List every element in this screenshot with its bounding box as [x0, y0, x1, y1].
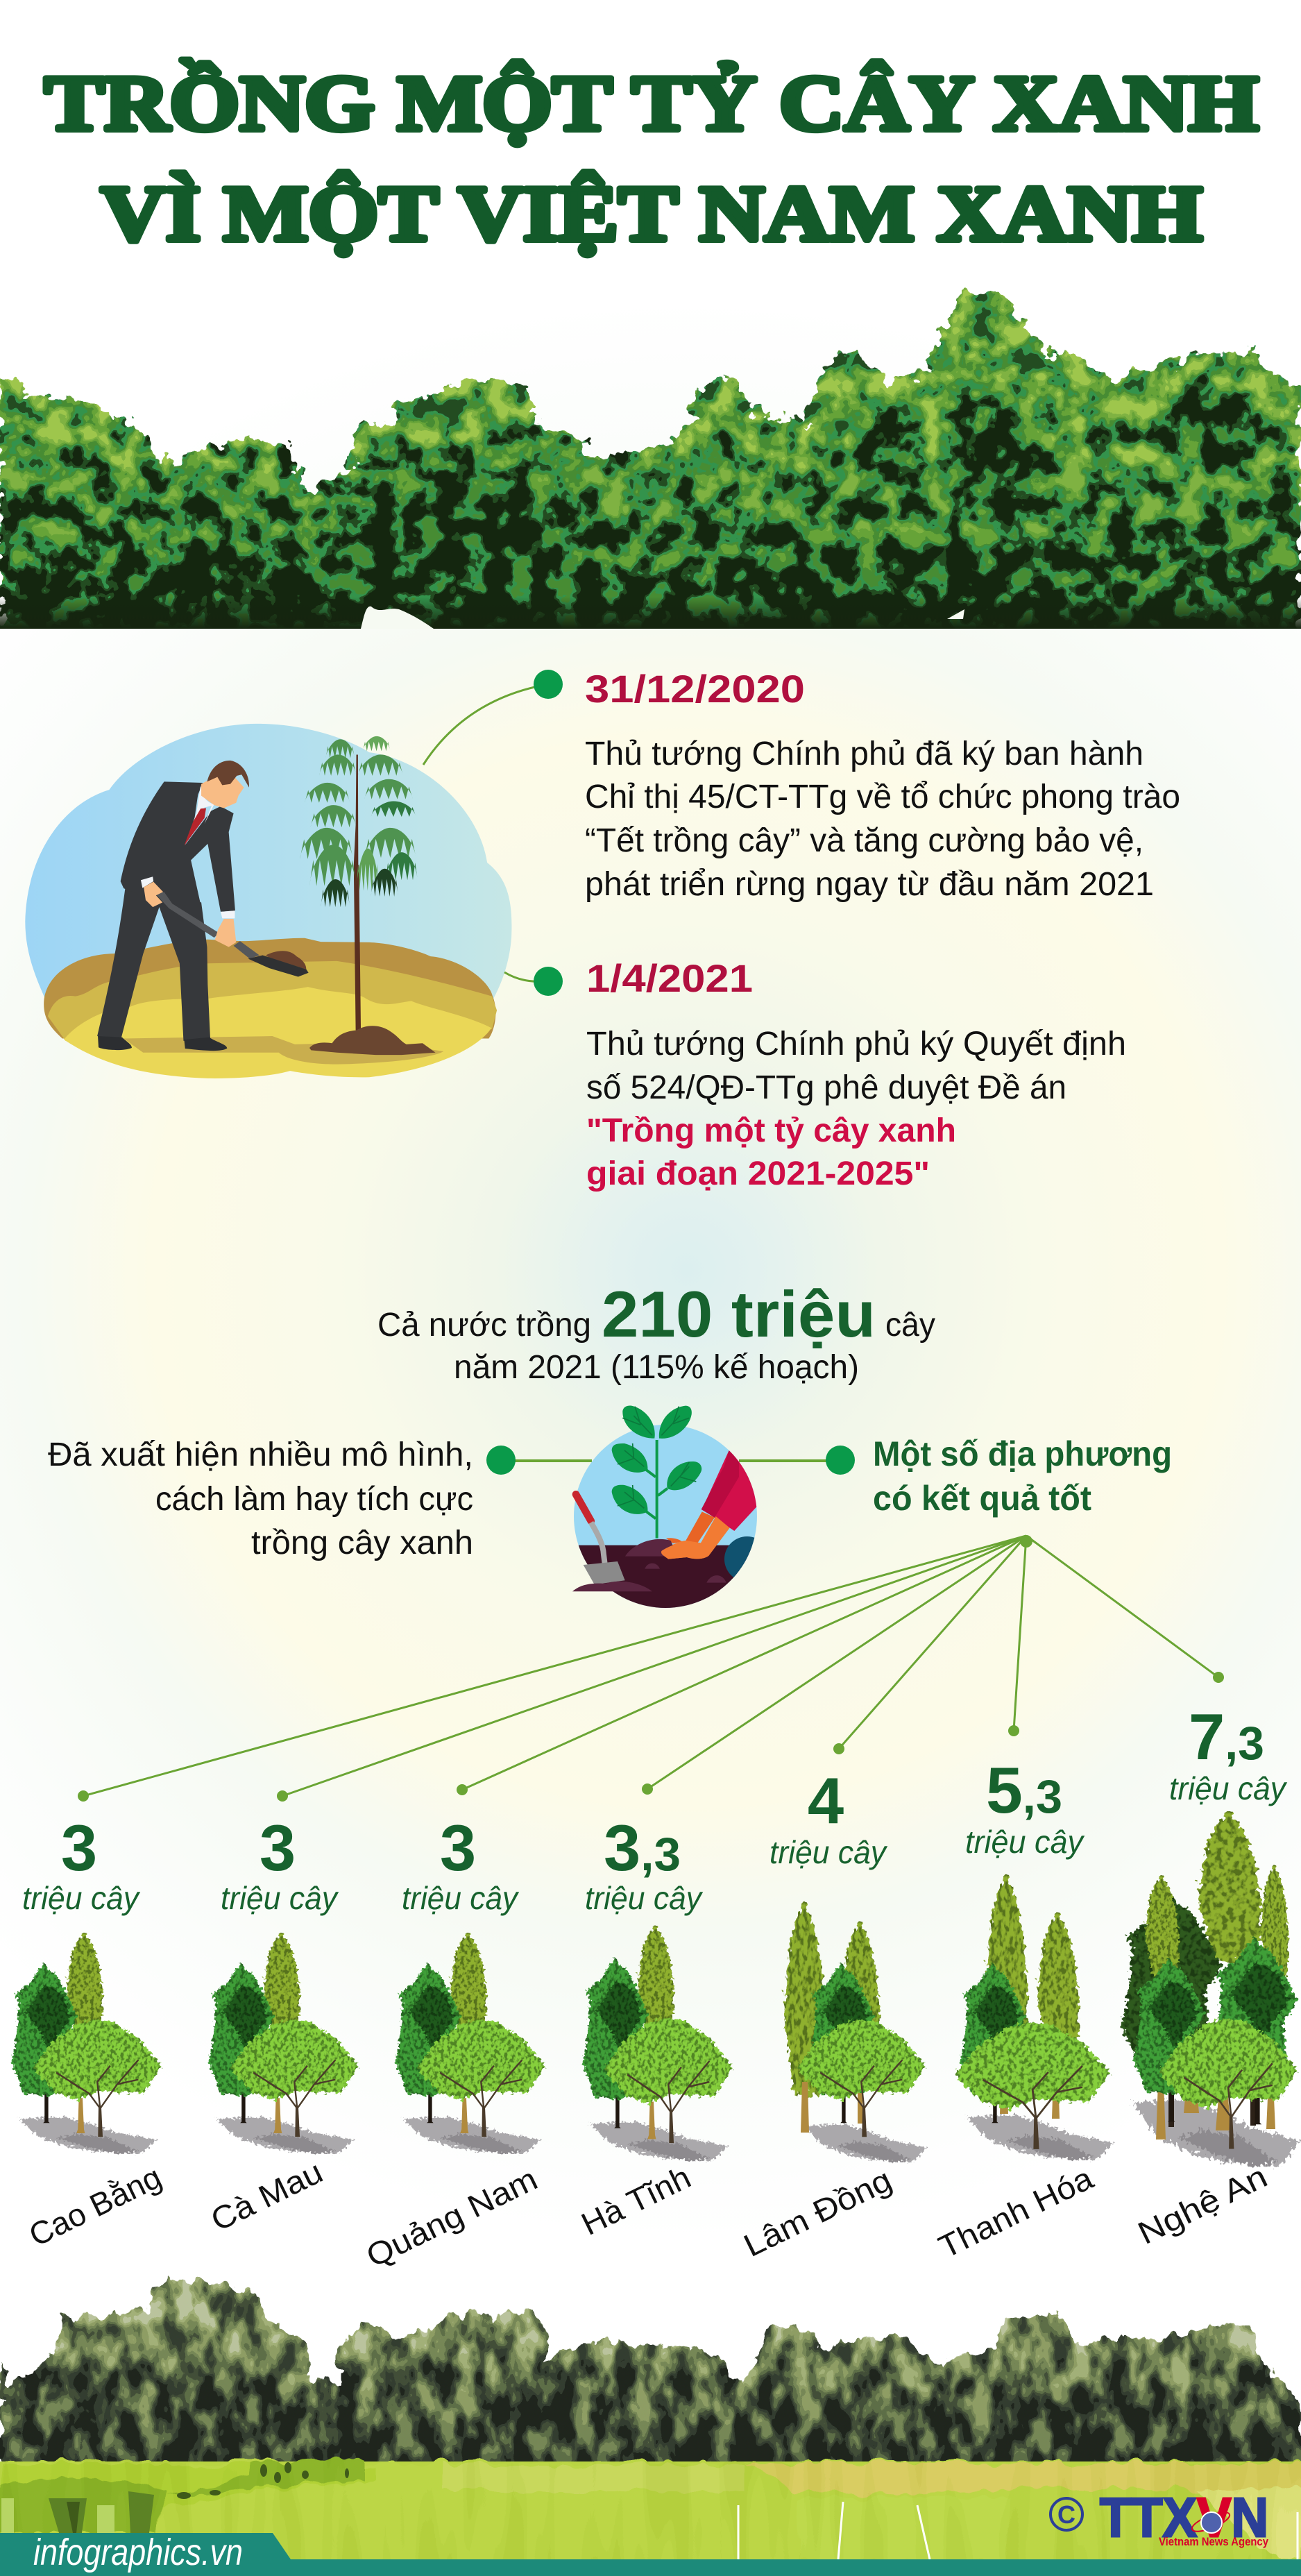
text: many models — [48, 1437, 473, 1561]
trees: Nghệ An — [1121, 1813, 1300, 2166]
text block: 1/4/2021: giai đoạn 2021-2025" — [586, 1155, 930, 1192]
stat: Hà Tĩnh — [585, 1811, 704, 1916]
place labels — [24, 2153, 1273, 2274]
place labels: Hà Tĩnh — [576, 2159, 696, 2242]
trees: Cao Bằng — [12, 1933, 162, 2153]
stat: Lâm Đồng: 4 — [808, 1764, 844, 1837]
meadow — [0, 2457, 1301, 2565]
place labels: Nghệ An — [1132, 2158, 1273, 2251]
stat: Lâm Đồng: triệu cây — [769, 1834, 888, 1870]
sapling — [300, 736, 436, 1055]
text: many models: cách làm hay tích cực — [155, 1481, 473, 1518]
stat: Thanh Hóa: triệu cây — [965, 1824, 1085, 1860]
place labels: Thanh Hóa — [933, 2160, 1098, 2265]
man with shovel — [97, 761, 309, 1051]
text block: 1/4/2021: Thủ tướng Chính phủ ký Quyết định — [586, 1026, 1126, 1062]
text: localities with good results — [873, 1434, 1172, 1518]
trees: Hà Tĩnh — [583, 1926, 733, 2161]
headline: 210 million trees: cây — [885, 1307, 935, 1344]
trees: Lâm Đồng — [784, 1903, 927, 2162]
illustration: man planting a tree — [25, 724, 511, 1078]
text block: 31/12/2020: “Tết trồng cây” và tăng cường bảo vệ, — [585, 822, 1143, 859]
connector: illustration to second date — [504, 972, 548, 981]
text block: 1/4/2021 — [586, 956, 1126, 1192]
stat: Quảng Nam: triệu cây — [402, 1880, 520, 1916]
text block: 31/12/2020 — [585, 667, 1180, 903]
place labels: Cà Mau — [205, 2153, 328, 2238]
dot: first date — [534, 670, 563, 699]
text block: 31/12/2020: 31/12/2020 — [585, 667, 805, 711]
fan of connector lines to provinces — [78, 1535, 1224, 1802]
stat: Nghệ An: 7,3 — [1189, 1700, 1264, 1773]
sky blob — [25, 724, 511, 1001]
stat: Cà Mau: triệu cây — [221, 1880, 339, 1916]
trees: Quảng Nam — [396, 1933, 545, 2153]
icon: seedling and hand — [572, 1406, 757, 1608]
stat: Nghệ An — [1169, 1700, 1288, 1806]
title: VÌ MỘT VIỆT NAM XANH — [101, 169, 1202, 257]
headline: 210 million trees: năm 2021 (115% kế hoạch) — [454, 1349, 859, 1386]
logo: TTXVN: Vietnam News Agency — [1159, 2535, 1268, 2548]
dot: right — [826, 1446, 855, 1475]
stat: Cao Bằng: triệu cây — [22, 1880, 141, 1916]
headline: 210 million trees — [377, 1278, 935, 1386]
trees: Thanh Hóa — [954, 1876, 1114, 2160]
logo: TTXVN: TTXVN — [1100, 2486, 1268, 2548]
title — [44, 59, 1259, 257]
place labels: Quảng Nam — [361, 2160, 543, 2274]
stat: Cà Mau: 3 — [260, 1811, 296, 1884]
stat: Thanh Hóa — [965, 1754, 1085, 1860]
text: localities with good results: Một số địa phương — [873, 1434, 1172, 1473]
ground layers — [44, 938, 497, 1078]
connector lines beside plant icon — [501, 1459, 840, 1462]
top forest band — [0, 290, 1301, 666]
stat: Hà Tĩnh: triệu cây — [585, 1880, 704, 1916]
stat: Nghệ An: triệu cây — [1169, 1770, 1288, 1806]
text block: 31/12/2020: Chỉ thị 45/CT-TTg về tổ chức phong trào — [585, 779, 1180, 815]
trees: Cà Mau — [209, 1933, 359, 2153]
footer band — [0, 2559, 1301, 2576]
text block: 1/4/2021: "Trồng một tỷ cây xanh — [586, 1112, 956, 1149]
bottom forest — [0, 2278, 1301, 2477]
stat: Thanh Hóa: 5,3 — [986, 1754, 1062, 1827]
stat: Lâm Đồng — [769, 1764, 888, 1870]
stat: Cao Bằng: 3 — [61, 1811, 97, 1884]
text block: 1/4/2021: 1/4/2021 — [586, 956, 753, 1000]
stat: Cao Bằng — [22, 1811, 141, 1916]
text: localities with good results: có kết quả tốt — [873, 1479, 1091, 1518]
footer tab: infographics.vn: infographics.vn — [33, 2532, 243, 2573]
text block: 31/12/2020: Thủ tướng Chính phủ đã ký ban hành — [585, 736, 1143, 772]
headline: 210 million trees: Cả nước trồng — [377, 1307, 591, 1344]
text block: 31/12/2020: phát triển rừng ngay từ đầu năm 2021 — [585, 866, 1154, 903]
dot: second date — [534, 967, 563, 996]
text: many models: trồng cây xanh — [251, 1525, 473, 1561]
dot: left — [486, 1446, 516, 1475]
place labels: Lâm Đồng — [738, 2161, 897, 2264]
place labels: Cao Bằng — [24, 2158, 167, 2253]
text: many models: Đã xuất hiện nhiều mô hình, — [48, 1437, 473, 1473]
stat: Hà Tĩnh: 3,3 — [604, 1811, 681, 1884]
title: TRỒNG MỘT TỶ CÂY XANH — [44, 59, 1259, 147]
text block: 1/4/2021: số 524/QĐ-TTg phê duyệt Đề án — [586, 1069, 1066, 1106]
stat: Cà Mau — [221, 1811, 339, 1916]
connector: illustration to first date — [423, 684, 548, 765]
stat: Quảng Nam — [402, 1811, 520, 1916]
logo: TTXVN: C — [1057, 2500, 1075, 2529]
stat: Quảng Nam: 3 — [440, 1811, 476, 1884]
headline: 210 million trees: 210 triệu — [602, 1278, 876, 1350]
